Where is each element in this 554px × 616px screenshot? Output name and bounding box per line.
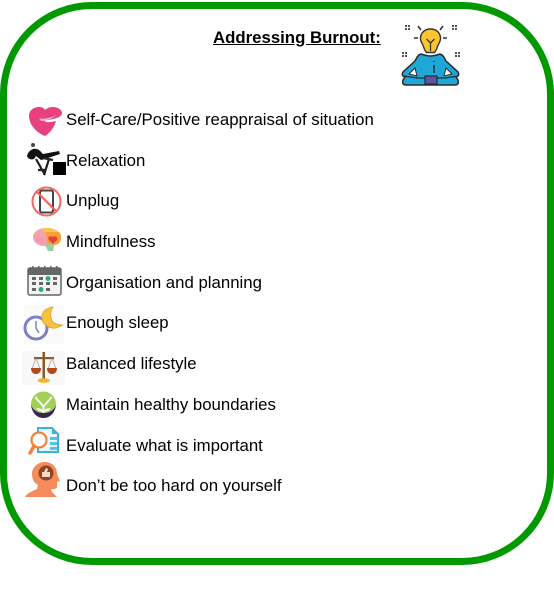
label: Mindfulness bbox=[66, 232, 156, 251]
icon: clock and crescent moon bbox=[24, 306, 64, 340]
label: Enough sleep bbox=[66, 313, 169, 332]
label: Relaxation bbox=[66, 151, 145, 170]
icon: meditating person with lightbulb head bbox=[402, 25, 460, 86]
list item: evaluate what is important bbox=[28, 427, 263, 455]
list item: organisation and planning bbox=[27, 266, 262, 296]
label: Don’t be too hard on yourself bbox=[66, 476, 282, 495]
icon: pink heart bbox=[29, 107, 62, 136]
icon: calendar bbox=[27, 266, 62, 296]
icon: person reclining on a chair bbox=[27, 143, 66, 176]
list item: unplug bbox=[32, 186, 119, 216]
icon: document and magnifying glass bbox=[28, 427, 59, 455]
list item: self-care bbox=[29, 107, 374, 136]
list item: relaxation bbox=[27, 143, 145, 176]
list item: maintain healthy boundaries bbox=[31, 392, 276, 418]
icon: orange head silhouette with thumbs-up bbox=[25, 462, 60, 497]
list item: balanced lifestyle bbox=[22, 351, 197, 385]
list item: mindfulness bbox=[33, 228, 156, 251]
label: Unplug bbox=[66, 191, 119, 210]
title: Addressing Burnout: bbox=[213, 28, 381, 47]
list item: enough sleep bbox=[24, 306, 169, 340]
label: Balanced lifestyle bbox=[66, 354, 197, 373]
icon: crossed-out phone bbox=[32, 186, 62, 216]
label: Maintain healthy boundaries bbox=[66, 395, 276, 414]
list item: don't be too hard on yourself bbox=[25, 462, 282, 497]
icon: balance scales bbox=[22, 351, 65, 385]
label: Self-Care/Positive reappraisal of situation bbox=[66, 110, 374, 129]
icon: colourful brain with heart bbox=[33, 228, 61, 251]
icon: green circle with sprouting figures bbox=[31, 392, 56, 418]
label: Evaluate what is important bbox=[66, 436, 263, 455]
label: Organisation and planning bbox=[66, 273, 262, 292]
